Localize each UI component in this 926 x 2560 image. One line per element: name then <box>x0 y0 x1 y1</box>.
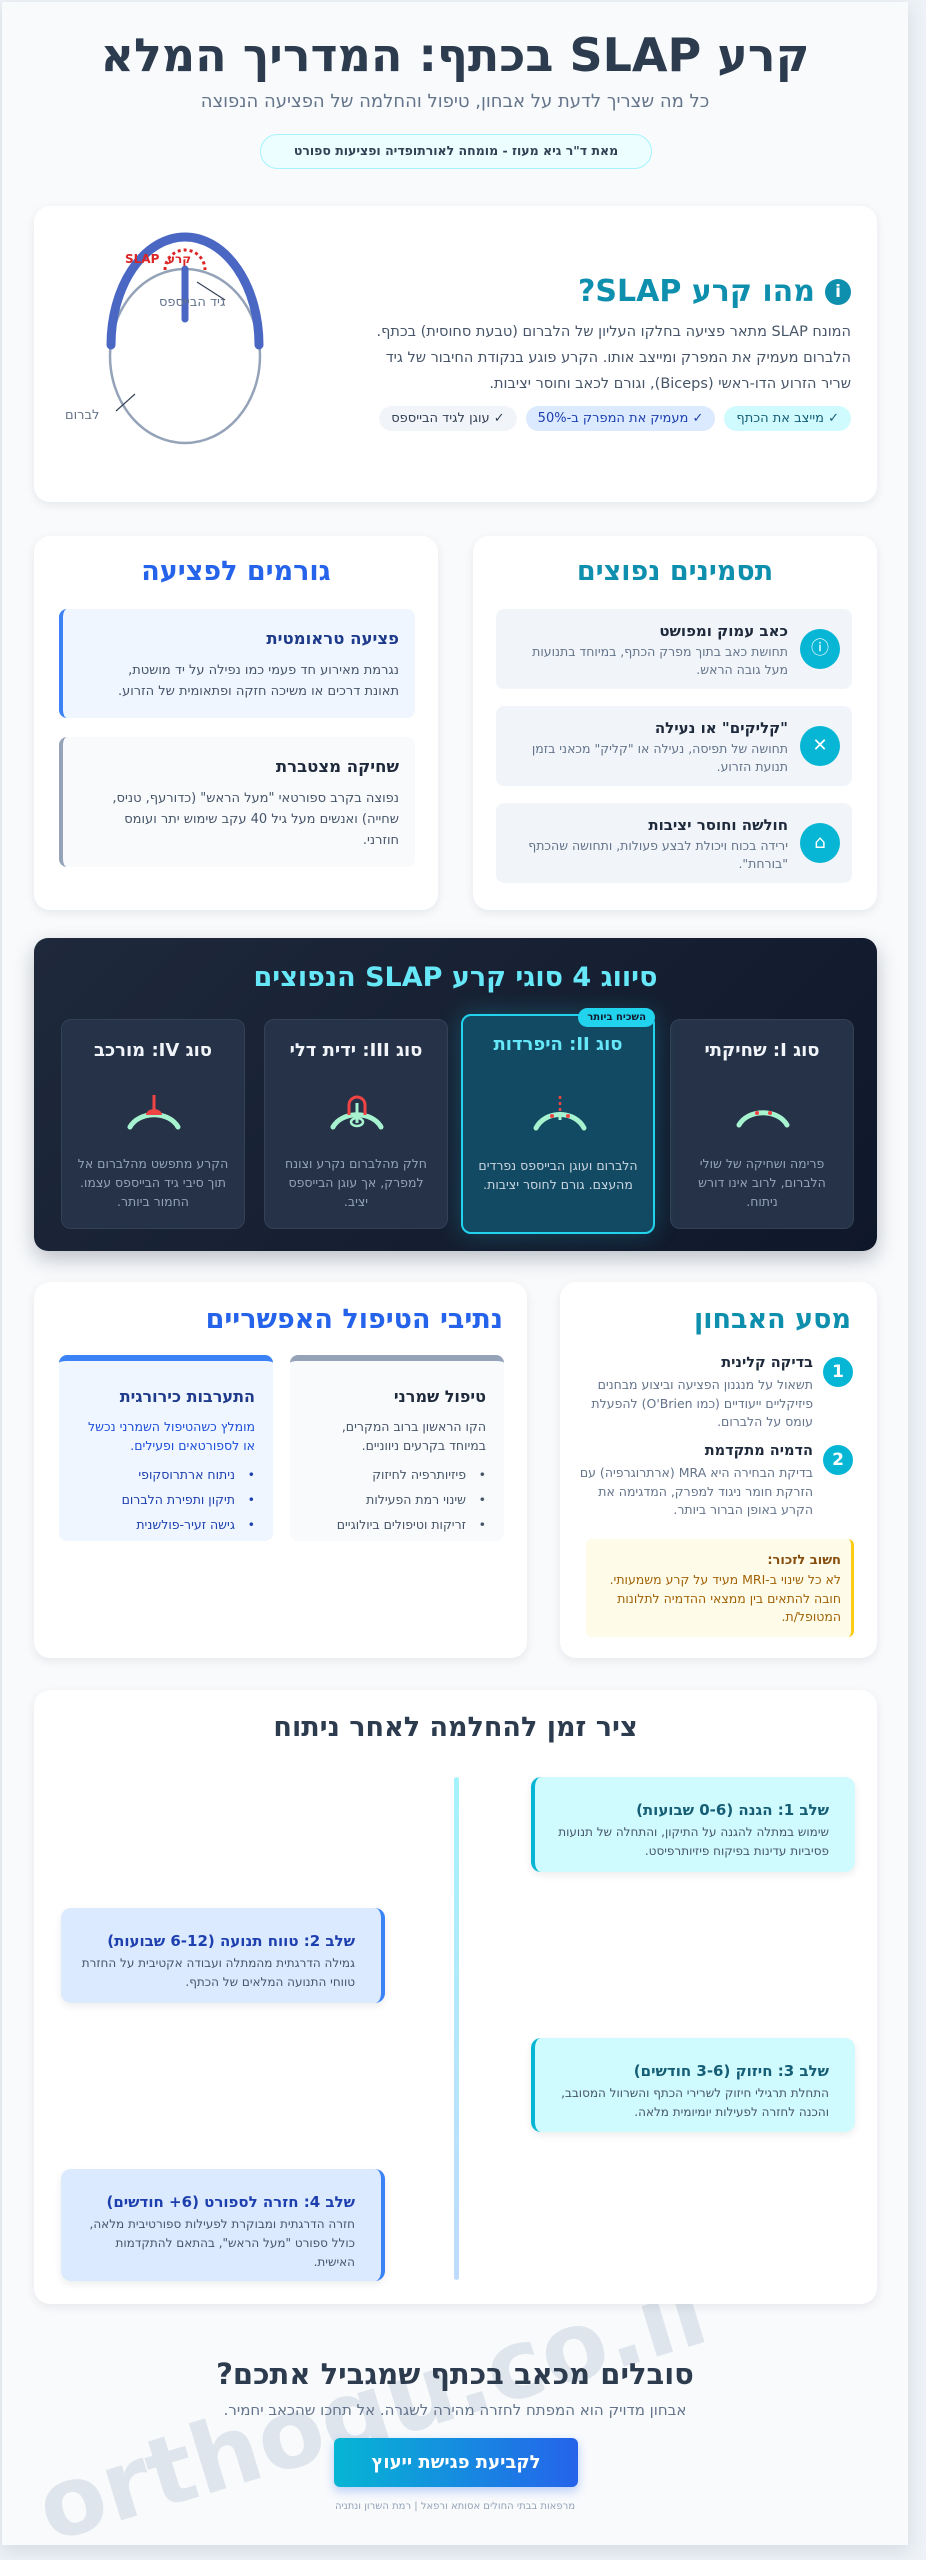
panel: recovery timeline <box>34 1690 877 2304</box>
cause: overuse <box>59 737 415 867</box>
step 1: בדיקה קלינית <box>721 1355 813 1371</box>
heading: מסע האבחון <box>694 1304 851 1335</box>
step 2: בדיקת הבחירה היא MRA (ארתרוגרפיה) עם הזרקת חומר ניגוד למפרק, המדגימה את הקרע באופן הברור ביותר. <box>580 1465 813 1517</box>
step 2: הדמיה מתקדמת <box>705 1443 813 1459</box>
symptom: clicks <box>496 706 852 786</box>
stage 2: שלב 2: טווח תנועה (6-12 שבועות) <box>107 1932 355 1950</box>
heading: סיווג 4 סוגי קרע SLAP הנפוצים <box>254 962 658 993</box>
step 2 <box>580 1443 853 1517</box>
panel: symptoms <box>473 536 877 910</box>
stage 1 <box>531 1777 855 1872</box>
paragraph: הלברום מעמיק את המפרק ומייצב אותו. הקרע פוגע בנקודת החיבור של גיד <box>386 350 851 366</box>
symptom: deep pain: כאב עמוק ומפושט <box>659 622 788 640</box>
heading: נתיבי הטיפול האפשריים <box>206 1304 503 1335</box>
surgical: תיקון ותפירת הלברום <box>122 1492 235 1507</box>
subtitle: כל מה שצריך לדעת על אבחון, טיפול והחלמה של הפציעה הנפוצה <box>201 91 709 112</box>
surgical: התערבות כירורגית <box>120 1387 255 1406</box>
symptom: weakness: ⌂ <box>814 832 826 853</box>
heading: תסמינים נפוצים <box>577 556 773 587</box>
cause: trauma: פציעה טראומטית <box>266 629 399 648</box>
type IV card: סוג IV: מורכב <box>94 1040 212 1061</box>
diagram: shoulder labrum <box>65 232 264 444</box>
CTA button: לקביעת פגישת ייעוץ <box>371 2452 541 2473</box>
timeline line <box>454 1777 459 2280</box>
conservative: הקו הראשון ברוב המקרים, במיוחד בקרעים ניווניים. <box>342 1419 486 1452</box>
type I card: פרימה ושחיקה של שולי הלברום, לרוב אינו דורש ניתוח. <box>698 1156 826 1209</box>
diagram: shoulder labrum: SLAP <box>125 252 160 266</box>
note: important: לא כל שינוי ב-MRI מעיד על קרע משמעותי. חובה להתאים בין ממצאי ההדמיה לתלונות המטופל/ת. <box>610 1572 841 1624</box>
heading: ציר זמן להחלמה לאחר ניתוח <box>273 1712 638 1743</box>
type I card: סוג I: שחיקתי <box>704 1040 820 1061</box>
paragraph: המונח SLAP מתאר פציעה בחלקו העליון של הלברום (טבעת סחוסית) בכתף. <box>377 324 851 340</box>
cause: overuse: שחיקה מצטברת <box>276 757 399 776</box>
CTA text: אבחון מדויק הוא המפתח לחזרה מהירה לשגרה. אל תחכו שהכאב יחמיר. <box>224 2401 686 2419</box>
type IV card: הקרע מתפשט מהלברום אל תוך סיבי גיד הבייספס עצמו. החמור ביותר. <box>78 1156 228 1209</box>
stage 3: התחלת תרגילי חיזוק לשרירי הכתף והשרוול המסובב, והכנה לחזרה לפעילות יומיומית מלאה. <box>561 2086 829 2119</box>
diagram: shoulder labrum: קרע <box>167 252 191 266</box>
step 2: 2 <box>832 1450 844 1470</box>
type III card: סוג III: ידית דלי <box>290 1040 422 1061</box>
chips: ✓ מעמיק את המפרק ב-50% <box>538 411 703 426</box>
symptom: weakness: ירידה בכוח ויכולת לבצע פעולות, ותחושה שהכתף "בורחת". <box>528 838 788 871</box>
heading: גורמים לפציעה <box>141 556 331 587</box>
symptom: clicks: ✕ <box>812 735 828 756</box>
conservative: זריקות וטיפולים ביולוגיים <box>337 1517 466 1532</box>
step 1: 1 <box>832 1362 844 1382</box>
symptom: clicks: תחושה של תפיסה, נעילה או "קליק" מכאני בזמן תנועת הזרוע. <box>532 741 788 774</box>
type II card (most common) <box>461 1014 655 1234</box>
symptom: deep pain: ⓘ <box>811 638 829 659</box>
chips <box>379 406 851 431</box>
stage 4: שלב 4: חזרה לספורט (6+ חודשים) <box>106 2193 355 2211</box>
note: important <box>586 1539 854 1637</box>
author badge: מאת ד"ר גיא מעוז - מומחה לאורתופדיה ופציעות ספורט <box>294 143 618 158</box>
stage 2 <box>61 1908 385 2003</box>
symptom: deep pain: תחושת כאב בתוך מפרק הכתף, במיוחד בתנועות מעל גובה הראש. <box>532 644 788 677</box>
cause: trauma: נגרמת מאירוע חד פעמי כמו נפילה על יד מושטת, תאונת דרכים או משיכה חזקה ופתאומית של הזרוע. <box>118 663 399 699</box>
badge most common: השכיח ביותר <box>587 1012 646 1023</box>
conservative: טיפול שמרני <box>394 1387 486 1406</box>
stage 3: שלב 3: חיזוק (3-6 חודשים) <box>634 2062 829 2080</box>
author badge <box>260 134 652 169</box>
CTA heading: סובלים מכאב בכתף שמגביל אתכם? <box>216 2357 694 2391</box>
chips: ✓ מייצב את הכתף <box>736 411 839 426</box>
type IV card <box>61 1019 245 1229</box>
symptom: weakness: חולשה וחוסר יציבות <box>648 816 788 834</box>
cause: trauma <box>59 609 415 718</box>
type III card: חלק מהלברום נקרע וצונח למפרק, אך עוגן הבייספס יציב. <box>285 1156 427 1209</box>
panel: what is SLAP <box>34 206 877 502</box>
type I card <box>670 1019 854 1229</box>
footer note: מרפאות בבתי החולים אסותא ורפאל | רמת השרון ונתניה <box>335 2501 575 2512</box>
symptom: weakness <box>496 803 852 883</box>
symptom: clicks: "קליקים" או נעילה <box>655 719 788 737</box>
conservative: פיזיותרפיה לחיזוק <box>372 1467 466 1482</box>
diagram: shoulder labrum: לברום <box>65 408 99 423</box>
paragraph <box>377 324 851 392</box>
stage 1: שלב 1: הגנה (0-6 שבועות) <box>636 1801 829 1819</box>
badge most common <box>578 1008 655 1027</box>
paragraph: שריר הזרוע הדו-ראשי (Biceps), וגורם לכאב וחוסר יציבות. <box>489 376 851 392</box>
note: important: חשוב לזכור: <box>767 1553 841 1568</box>
chips: ✓ עוגן לגיד הבייספס <box>391 411 505 426</box>
step 1: תשאול על מנגנון הפציעה וביצוע מבחנים פיזיקליים ייעודיים (כמו O'Brien) להפעלת עומס על הלברום. <box>591 1377 813 1429</box>
heading with info icon: מהו קרע SLAP? <box>578 274 815 309</box>
conservative <box>290 1355 504 1541</box>
panel: diagnosis journey <box>560 1282 877 1658</box>
panel: treatment paths <box>34 1282 527 1658</box>
diagram: shoulder labrum: גיד הבייספס <box>159 295 225 310</box>
panel: causes <box>34 536 438 910</box>
surgical: ניתוח ארתרוסקופי <box>138 1467 235 1482</box>
panel: SLAP types (dark) <box>34 938 877 1251</box>
stage 3 <box>531 2038 855 2132</box>
step 1 <box>591 1355 853 1429</box>
conservative: שינוי רמת הפעילות <box>366 1492 466 1507</box>
title: קרע SLAP בכתף: המדריך המלא <box>101 28 809 82</box>
type III card <box>264 1019 448 1229</box>
stage 4: חזרה הדרגתית ומבוקרת לפעילות ספורטיבית מלאה, כולל ספורט "מעל הראש", בהתאם להתקדמות האישית. <box>90 2217 355 2269</box>
surgical <box>59 1355 273 1541</box>
type II card (most common): סוג II: היפרדות <box>493 1034 622 1055</box>
stage 2: גמילה הדרגתית מהמתלה ועבודה אקטיבית על החזרת טווחי התנועה המלאים של הכתף. <box>82 1956 355 1989</box>
cause: overuse: נפוצה בקרב ספורטאי "מעל הראש" (כדורעף, טניס, שחייה) ואנשים מעל גיל 40 עקב שימוש יתר ועומס חוזרני. <box>112 791 399 848</box>
symptom: deep pain <box>496 609 852 689</box>
heading with info icon: i <box>835 282 841 302</box>
stage 4 <box>61 2169 385 2281</box>
surgical: מומלץ כשהטיפול השמרני נכשל או לספורטאים ופעילים. <box>88 1419 255 1452</box>
CTA button <box>334 2438 578 2487</box>
type II card (most common): הלברום ועוגן הבייספס נפרדים מהעצם. גורם לחוסר יציבות. <box>478 1158 638 1192</box>
stage 1: שימוש במתלה להגנה על התיקון, והתחלה של תנועות פסיביות עדינות בפיקוח פיזיותרפיסט. <box>558 1825 829 1858</box>
surgical: גישה זעיר-פולשנית <box>136 1517 235 1532</box>
